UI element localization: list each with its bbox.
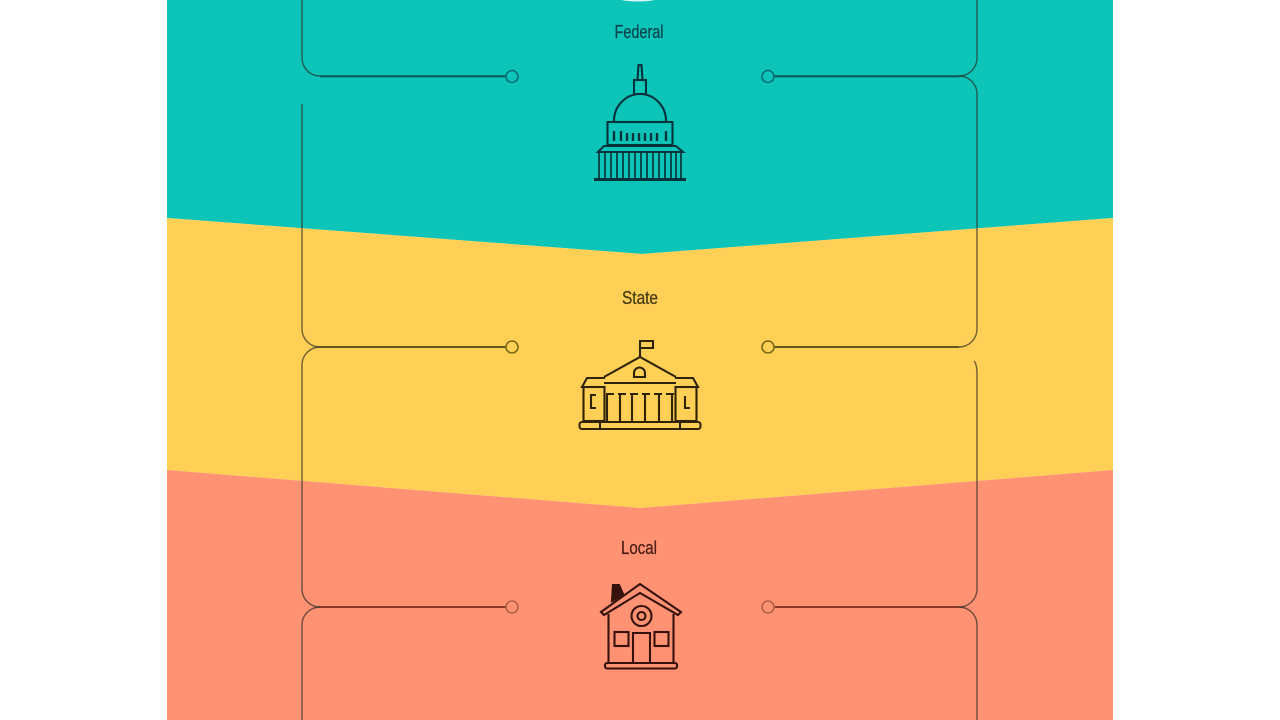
heading: state: State: [622, 288, 658, 308]
heading: local: Local: [621, 538, 657, 558]
right connector lines: [774, 0, 977, 720]
left connector lines: [302, 0, 506, 720]
connector node: local left: [506, 601, 518, 613]
connector node: state left: [506, 341, 518, 353]
connector node: state right: [762, 341, 774, 353]
icon: state house: [580, 341, 700, 429]
connector node: federal right: [762, 70, 774, 82]
band: federal: [167, 0, 1113, 254]
band: local: [167, 470, 1113, 720]
heading: federal: Federal: [614, 22, 664, 42]
connector node: local right: [762, 601, 774, 613]
horizontal connector emphasis: [320, 76, 959, 607]
icon: local house: [601, 584, 681, 668]
band: state: [167, 218, 1113, 508]
icon: capitol building: [594, 65, 686, 180]
top circle remnant: [620, 0, 656, 2]
connector node: federal left: [506, 70, 518, 82]
